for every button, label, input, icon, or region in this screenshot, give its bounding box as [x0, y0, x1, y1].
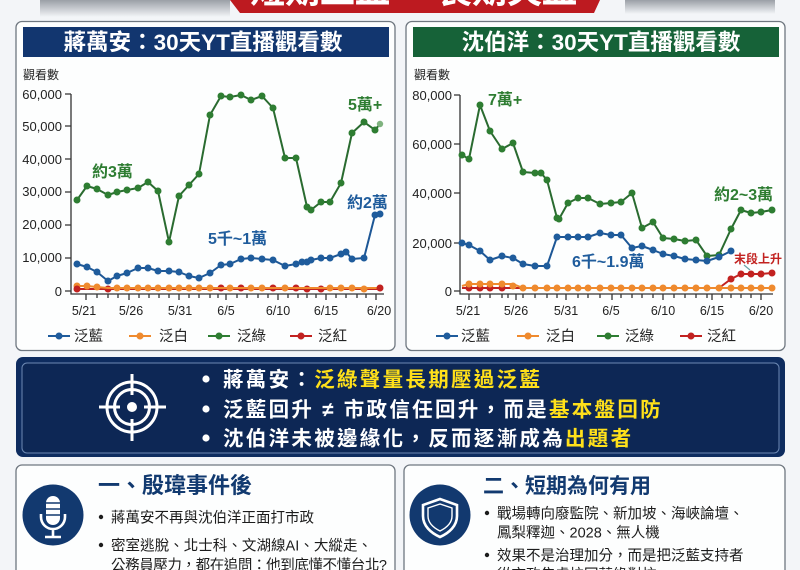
legend: 泛藍: [461, 328, 490, 345]
bullet list: [485, 504, 744, 570]
x axis labels: 6/20: [749, 304, 773, 318]
series: 泛藍: [77, 214, 380, 281]
heading: 沈伯洋: 沈伯洋：30天YT直播觀看數: [462, 30, 741, 55]
bullet list: 效果不是治理加分，而是把泛藍支持者: [497, 548, 744, 564]
y axis labels: 60,000: [22, 87, 62, 102]
series: 泛紅: [462, 273, 772, 288]
x axis labels: 5/21: [72, 304, 96, 318]
series: 泛綠: [462, 105, 772, 256]
axis title: 觀看數: [23, 68, 59, 82]
icon: microphone: [22, 484, 84, 546]
y axis labels: 50,000: [22, 119, 62, 134]
x axis labels: 6/15: [700, 304, 724, 318]
y axis labels: 20,000: [412, 236, 452, 251]
series: 泛白: [462, 284, 772, 288]
panel: 蔣萬安 chart: [16, 22, 395, 350]
icon: target crosshair: [99, 374, 166, 441]
legend: 泛綠: [237, 328, 266, 345]
heading: 蔣萬安: 蔣萬安：30天YT直播觀看數: [64, 30, 343, 55]
x axis labels: 6/10: [266, 304, 290, 318]
x axis labels: 6/10: [651, 304, 675, 318]
panel: 殷瑋事件後: [16, 465, 395, 570]
y axis labels: [412, 88, 452, 299]
y axis labels: 0: [445, 284, 452, 299]
callout: 約2~3萬: 約2~3萬: [714, 185, 773, 204]
x axis labels: 5/26: [119, 304, 143, 318]
bullet list: [99, 510, 387, 570]
panel: 短期為何有用: [404, 465, 785, 570]
series: 泛紅: [77, 288, 380, 289]
callout: 約2萬: 約2萬: [347, 193, 388, 212]
legend: 泛藍: [74, 328, 103, 345]
x axis labels: 6/5: [217, 304, 235, 318]
headline banner: [230, 0, 600, 13]
heading: 蔣萬安: [23, 27, 389, 57]
callout: 6千~1.9萬: 6千~1.9萬: [572, 253, 644, 271]
line chart: 蔣萬安: [22, 87, 391, 318]
legend: 泛白: [546, 328, 575, 345]
y axis labels: 20,000: [22, 217, 62, 232]
x axis labels: [456, 304, 773, 318]
line chart: 沈伯洋: [412, 88, 782, 318]
y axis labels: 40,000: [412, 186, 452, 201]
y axis labels: 0: [55, 284, 62, 299]
x axis labels: 5/31: [168, 304, 192, 318]
panel: key takeaways banner: [16, 357, 785, 457]
panel: 沈伯洋 chart: [406, 22, 785, 350]
bullet list: 密室逃脫、北士科、文湖線AI、大縱走、: [111, 538, 372, 554]
takeaway 2: 泛藍回升 ≠ 市政信任回升，而是基本盤回防: [223, 398, 663, 422]
y axis labels: 40,000: [22, 152, 62, 167]
x axis labels: 5/26: [504, 304, 528, 318]
x axis labels: 5/21: [456, 304, 480, 318]
callout: 約3萬: 約3萬: [92, 162, 133, 181]
callout: 5萬+: 5萬+: [348, 96, 382, 114]
x axis labels: [72, 304, 391, 318]
legend: 泛紅: [318, 328, 347, 345]
x axis labels: 5/31: [554, 304, 578, 318]
x axis labels: 6/15: [314, 304, 338, 318]
legend: [436, 328, 736, 345]
callout: 7萬+: 7萬+: [488, 91, 522, 109]
legend: 泛白: [159, 328, 188, 345]
y axis labels: 80,000: [412, 88, 452, 103]
x axis labels: 6/5: [602, 304, 620, 318]
y axis labels: 30,000: [22, 184, 62, 199]
series: 泛綠: [77, 95, 383, 242]
series: 泛白: [77, 286, 380, 289]
y axis labels: [22, 87, 62, 299]
bullet list: 鳳梨釋迦、2028、無人機: [497, 524, 660, 542]
axis title: 觀看數: [414, 68, 450, 82]
takeaway 3: 沈伯洋未被邊緣化，反而逐漸成為出題者: [223, 426, 633, 450]
series: 泛藍: [462, 233, 731, 266]
icon: shield: [410, 484, 470, 546]
y axis labels: 60,000: [412, 137, 452, 152]
legend: [48, 328, 347, 345]
heading: 二、短期為何有用: [483, 475, 651, 498]
callout: 5千~1萬: 5千~1萬: [208, 230, 267, 248]
callout: 末段上升: 末段上升: [734, 251, 782, 266]
legend: 泛綠: [625, 328, 654, 345]
bullet list: 蔣萬安不再與沈伯洋正面打市政: [111, 510, 314, 526]
legend: 泛紅: [707, 328, 736, 345]
heading: 一、殷瑋事件後: [98, 473, 252, 498]
x axis labels: 6/20: [367, 304, 391, 318]
heading: 沈伯洋: [413, 27, 779, 57]
bullet list: 戰場轉向廢監院、新加坡、海峽論壇、: [497, 504, 744, 522]
takeaway 1: 蔣萬安：泛綠聲量長期壓過泛藍: [223, 368, 542, 392]
y axis labels: 10,000: [22, 250, 62, 265]
